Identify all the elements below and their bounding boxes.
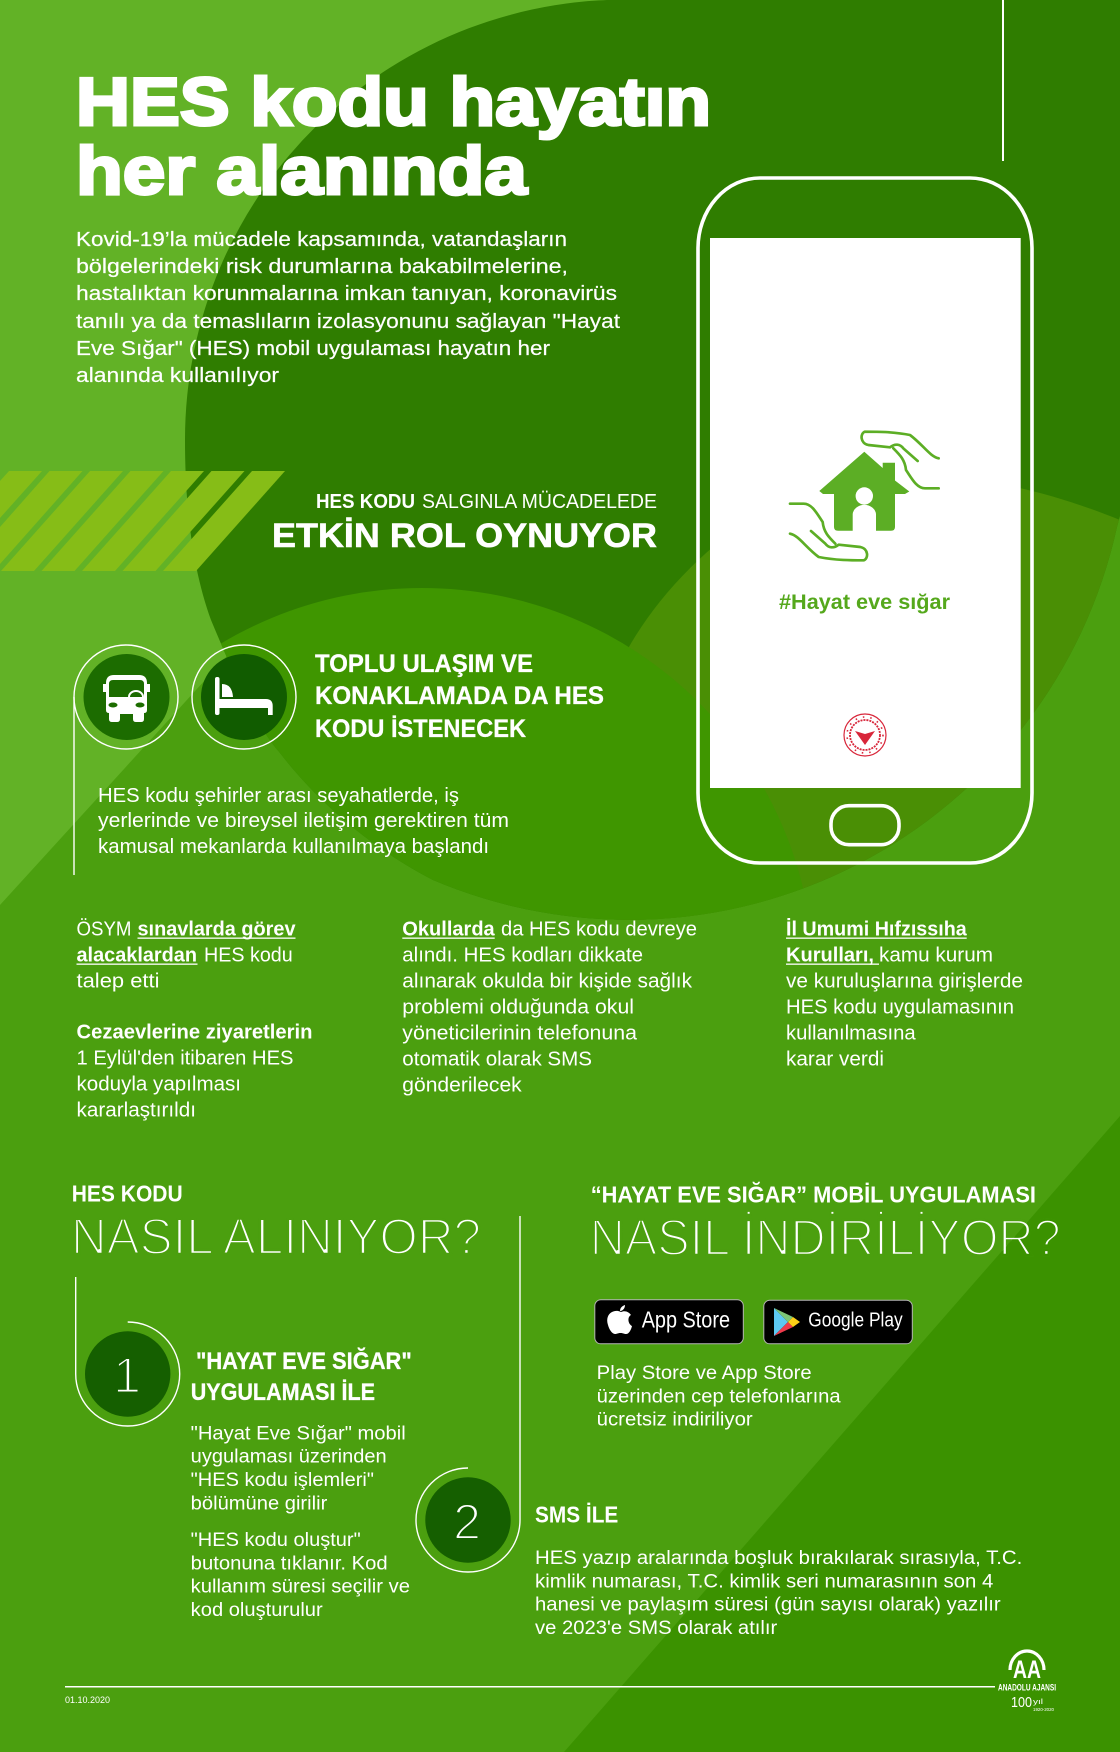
text: store info — [597, 1363, 841, 1431]
intro paragraph: Eve Sığar" (HES) mobil uygulaması hayatın her — [76, 338, 550, 360]
column: okullar: gönderilecek — [402, 1075, 523, 1097]
decorative stripes — [0, 471, 285, 571]
title — [76, 64, 711, 209]
column: okullar — [402, 919, 697, 1097]
step 1 heading: UYGULAMASI İLE — [191, 1379, 375, 1406]
icon: bus — [74, 645, 178, 875]
column: ösym and cezaevleri: Cezaevlerine ziyaretlerin — [76, 1022, 312, 1044]
heading: nasıl alınıyor — [71, 1181, 481, 1265]
intro paragraph: bölgelerindeki risk durumlarına bakabilmelerine, — [76, 256, 568, 278]
column: okullar: alınarak okulda bir kişide sağlık — [402, 971, 693, 993]
step 1 text: "Hayat Eve Sığar" mobil — [191, 1423, 406, 1444]
step 2 heading: SMS İLE — [535, 1501, 618, 1527]
column: okullar: yöneticilerinin telefonuna — [402, 1023, 638, 1045]
column: ösym and cezaevleri: alacaklardan — [76, 945, 197, 967]
step 2 text: HES yazıp aralarında boşluk bırakılarak sırasıyla, T.C. — [535, 1548, 1022, 1569]
button: app store — [595, 1300, 743, 1344]
phone screen — [710, 238, 1021, 788]
step 1 text — [191, 1423, 410, 1621]
heading: etkin rol oynuyor — [272, 491, 657, 555]
column: okullar: alındı. HES kodları dikkate — [402, 945, 643, 967]
heading: nasıl alınıyor: NASIL ALINIYOR? — [71, 1208, 481, 1265]
column: il umumi hıfzıssıha: kamu kurum — [879, 945, 993, 967]
step 1 marker — [76, 1277, 180, 1426]
phone — [698, 0, 1032, 863]
heading: nasıl indiriliyor: NASIL İNDİRİLİYOR? — [590, 1209, 1061, 1266]
heading: nasıl indiriliyor: NASIL İNDİRİLİYOR? — [590, 1209, 1061, 1266]
heading: etkin rol oynuyor: SALGINLA MÜCADELEDE — [422, 491, 657, 513]
step 1 heading: "HAYAT EVE SIĞAR" — [196, 1347, 412, 1375]
title: HES kodu hayatın — [76, 64, 711, 140]
column: ösym and cezaevleri: ÖSYM — [76, 919, 132, 941]
step 1 text: butonuna tıklanır. Kod — [191, 1553, 388, 1574]
logo: anadolu ajansı: 1920-2020 — [1033, 1707, 1054, 1712]
logo: anadolu ajansı — [998, 1651, 1056, 1712]
home button — [831, 806, 899, 845]
intro paragraph: hastalıktan korunmalarına imkan tanıyan, koronavirüs — [76, 283, 617, 305]
column: ösym and cezaevleri: sınavlarda görev — [138, 919, 296, 941]
heading: etkin rol oynuyor: ETKİN ROL OYNUYOR — [272, 517, 657, 555]
text: store info: üzerinden cep telefonlarına — [597, 1386, 841, 1407]
heading: toplu ulaşım — [315, 650, 604, 743]
heading: etkin rol oynuyor: HES KODU — [316, 491, 415, 513]
text: toplu ulaşım body: kamusal mekanlarda kullanılmaya başlandı — [98, 835, 489, 858]
logo: anadolu ajansı: AA — [1013, 1656, 1041, 1684]
logo: anadolu ajansı: ANADOLU AJANSI — [998, 1683, 1056, 1693]
column: ösym and cezaevleri — [76, 919, 312, 1122]
footer line and date: 01.10.2020 — [65, 1695, 110, 1705]
logo: anadolu ajansı: 100 — [1011, 1694, 1032, 1711]
column: il umumi hıfzıssıha: kullanılmasına — [786, 1023, 917, 1045]
button: google play: Google Play — [808, 1310, 903, 1332]
heading: toplu ulaşım: TOPLU ULAŞIM VE — [315, 650, 533, 678]
step 1 heading — [191, 1347, 412, 1406]
step 1 text: "HES kodu işlemleri" — [191, 1470, 374, 1491]
column: okullar: otomatik olarak SMS — [402, 1049, 592, 1071]
heading: nasıl alınıyor: HES KODU — [72, 1181, 183, 1207]
column: okullar: da HES kodu devreye — [501, 919, 697, 941]
column: ösym and cezaevleri: koduyla yapılması — [76, 1074, 241, 1096]
step 2 text: hanesi ve paylaşım süresi (gün sayısı olarak) yazılır — [535, 1595, 1001, 1616]
step 1 text: uygulaması üzerinden — [191, 1447, 387, 1468]
column: il umumi hıfzıssıha — [786, 918, 1023, 1071]
heading: toplu ulaşım: KODU İSTENECEK — [315, 715, 526, 743]
column: ösym and cezaevleri: HES kodu — [204, 945, 293, 967]
column: okullar: Okullarda — [402, 919, 496, 941]
column: ösym and cezaevleri: talep etti — [76, 971, 160, 993]
column: il umumi hıfzıssıha: İl Umumi Hıfzıssıha — [786, 918, 968, 941]
title: her alanında — [76, 133, 528, 209]
column: ösym and cezaevleri: 1 Eylül'den itibaren HES — [76, 1048, 294, 1070]
step 2 marker — [416, 1216, 520, 1572]
step 1 text: kullanım süresi seçilir ve — [191, 1577, 410, 1598]
column: ösym and cezaevleri: kararlaştırıldı — [76, 1100, 196, 1122]
text: store info: ücretsiz indiriliyor — [597, 1410, 753, 1431]
column: il umumi hıfzıssıha: ve kuruluşlarına girişlerde — [786, 971, 1023, 993]
step 1 text: "HES kodu oluştur" — [191, 1530, 361, 1551]
button: app store: App Store — [642, 1307, 730, 1333]
step 1 text: bölümüne girilir — [191, 1493, 328, 1514]
column: il umumi hıfzıssıha: Kurulları, — [786, 945, 874, 967]
column: il umumi hıfzıssıha: karar verdi — [786, 1049, 884, 1071]
intro paragraph: Kovid-19’la mücadele kapsamında, vatandaşların — [76, 229, 567, 251]
step 1 text: kod oluşturulur — [191, 1600, 323, 1621]
hashtag: #Hayat eve sığar — [779, 591, 950, 614]
intro paragraph: alanında kullanılıyor — [76, 365, 279, 387]
step 1 marker: 1 — [113, 1348, 141, 1404]
step 2 marker: 2 — [453, 1494, 481, 1550]
button: google play — [764, 1300, 912, 1344]
text: store info: Play Store ve App Store — [597, 1363, 812, 1384]
logo: anadolu ajansı: yıl — [1033, 1699, 1044, 1706]
column: il umumi hıfzıssıha: HES kodu uygulamasının — [786, 997, 1014, 1019]
text: toplu ulaşım body — [98, 784, 509, 858]
intro paragraph: tanılı ya da temaslıların izolasyonunu sağlayan "Hayat — [76, 311, 620, 333]
column: okullar: problemi olduğunda okul — [402, 997, 634, 1019]
heading: nasıl indiriliyor: “HAYAT EVE SIĞAR” MOBİL UYGULAMASI — [591, 1181, 1036, 1208]
intro paragraph — [76, 229, 620, 387]
heading: nasıl indiriliyor — [592, 1182, 1058, 1254]
text: toplu ulaşım body: yerlerinde ve bireysel iletişim gerektiren tüm — [98, 809, 509, 832]
ministry emblem — [844, 714, 886, 756]
step 2 text — [535, 1548, 1022, 1639]
icon: house with hands — [790, 432, 939, 560]
heading: toplu ulaşım: KONAKLAMADA DA HES — [315, 682, 604, 710]
text: toplu ulaşım body: HES kodu şehirler arası seyahatlerde, iş — [98, 784, 459, 807]
icon: bed — [192, 645, 296, 749]
step 2 text: ve 2023'e SMS olarak atılır — [535, 1618, 778, 1639]
step 2 text: kimlik numarası, T.C. kimlik seri numarasının son 4 — [535, 1571, 994, 1592]
